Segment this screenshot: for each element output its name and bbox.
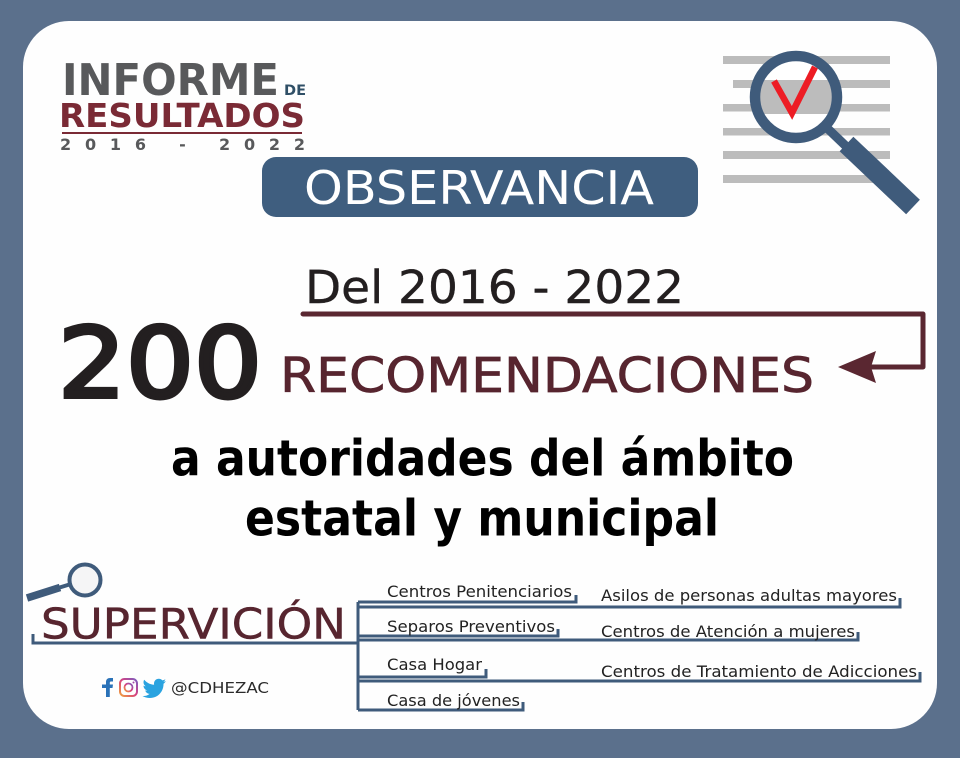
list of supervised places: Casa de jóvenes bbox=[387, 691, 520, 710]
list of supervised places: Asilos de personas adultas mayores bbox=[601, 586, 897, 605]
logo: Informe de Resultados: DE bbox=[284, 83, 306, 99]
statement text bbox=[171, 430, 794, 548]
date heading: Del 2016 - 2022 bbox=[305, 261, 684, 314]
list of supervised places: Centros de Atención a mujeres bbox=[601, 622, 855, 641]
arrow bbox=[303, 314, 923, 383]
logo: Informe de Resultados: 2016 - 2022 bbox=[60, 135, 305, 154]
logo: Informe de Resultados bbox=[59, 55, 306, 154]
icon: document with magnifying glass bbox=[723, 56, 913, 207]
heading: Supervición: SUPERVICIÓN bbox=[41, 598, 346, 648]
icon: small magnifying glass bbox=[27, 564, 100, 598]
list of supervised places: Centros Penitenciarios bbox=[387, 582, 572, 601]
list of supervised places: Separos Preventivos bbox=[387, 617, 555, 636]
connector lines bbox=[33, 595, 920, 710]
heading: Observancia bbox=[262, 157, 698, 217]
icon: twitter bbox=[142, 679, 166, 698]
social handle: @CDHEZAC bbox=[171, 679, 269, 697]
logo: Informe de Resultados: RESULTADOS bbox=[59, 96, 305, 135]
list of supervised places: Casa Hogar bbox=[387, 655, 482, 674]
list of supervised places: Centros de Tratamiento de Adicciones bbox=[601, 662, 917, 681]
big number: 200: 200 bbox=[58, 307, 262, 420]
logo: Informe de Resultados: INFORME bbox=[62, 55, 279, 106]
icon: instagram bbox=[120, 679, 137, 696]
heading: Observancia: OBSERVANCIA bbox=[304, 161, 655, 215]
statement text: estatal y municipal bbox=[245, 490, 719, 548]
statement text: a autoridades del ámbito bbox=[171, 430, 794, 488]
icon: facebook bbox=[102, 678, 113, 697]
list of supervised places bbox=[387, 582, 917, 710]
label: recomendaciones: RECOMENDACIONES bbox=[280, 348, 814, 404]
